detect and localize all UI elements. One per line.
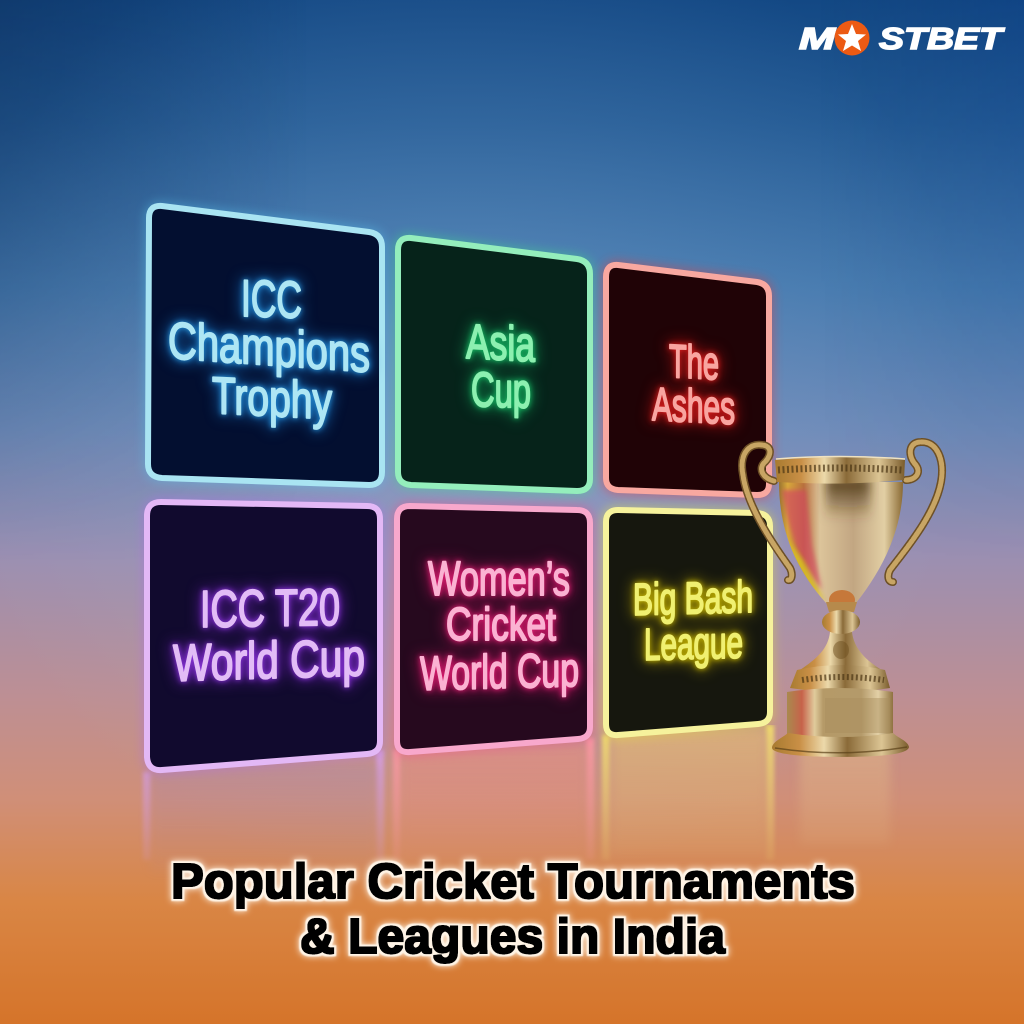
trophy foot (772, 733, 909, 757)
trophy collar ornament (790, 665, 890, 692)
panel: ICC Champions Trophy: Trophy (212, 367, 332, 431)
logo star badge (834, 20, 870, 56)
panel: The Ashes: Ashes (652, 377, 735, 434)
panel: ICC T20 World Cup (147, 502, 380, 770)
panel: Asia Cup: Cup (471, 363, 531, 419)
panel: Big Bash League: Big Bash (633, 571, 753, 625)
panel: ICC T20 World Cup: World Cup (173, 629, 365, 693)
title (171, 855, 855, 964)
panel: Asia Cup: Asia (466, 315, 536, 372)
logo: MOSTBET: M (799, 21, 837, 56)
trophy rim band (775, 457, 905, 484)
logo: MOSTBET (799, 20, 1006, 56)
panel: Asia Cup (398, 238, 590, 491)
panel: Women's Cricket World Cup: Women’s (428, 553, 570, 606)
panel: ICC T20 World Cup: ICC T20 (200, 579, 340, 639)
title: & Leagues in India (300, 910, 726, 964)
panel: ICC Champions Trophy (148, 206, 382, 485)
panel: Big Bash League (606, 510, 770, 735)
icon: gold trophy (742, 442, 942, 757)
trophy stem (797, 632, 885, 672)
logo: MOSTBET: STBET (879, 21, 1006, 56)
trophy bowl (779, 482, 903, 603)
title: Popular Cricket Tournaments (171, 855, 855, 909)
panel: Women's Cricket World Cup: Cricket (446, 598, 556, 650)
trophy base (787, 688, 893, 738)
panel: Women's Cricket World Cup (397, 506, 590, 752)
floor reflections of the panels (147, 725, 890, 875)
panel: ICC Champions Trophy: ICC (241, 270, 302, 330)
trophy handles (742, 442, 942, 582)
panel: The Ashes: The (669, 334, 719, 389)
panel: ICC Champions Trophy: Champions (168, 312, 370, 384)
panel: Big Bash League: League (644, 617, 743, 670)
panel: The Ashes (606, 265, 769, 495)
panel: Women's Cricket World Cup: World Cup (420, 644, 579, 701)
